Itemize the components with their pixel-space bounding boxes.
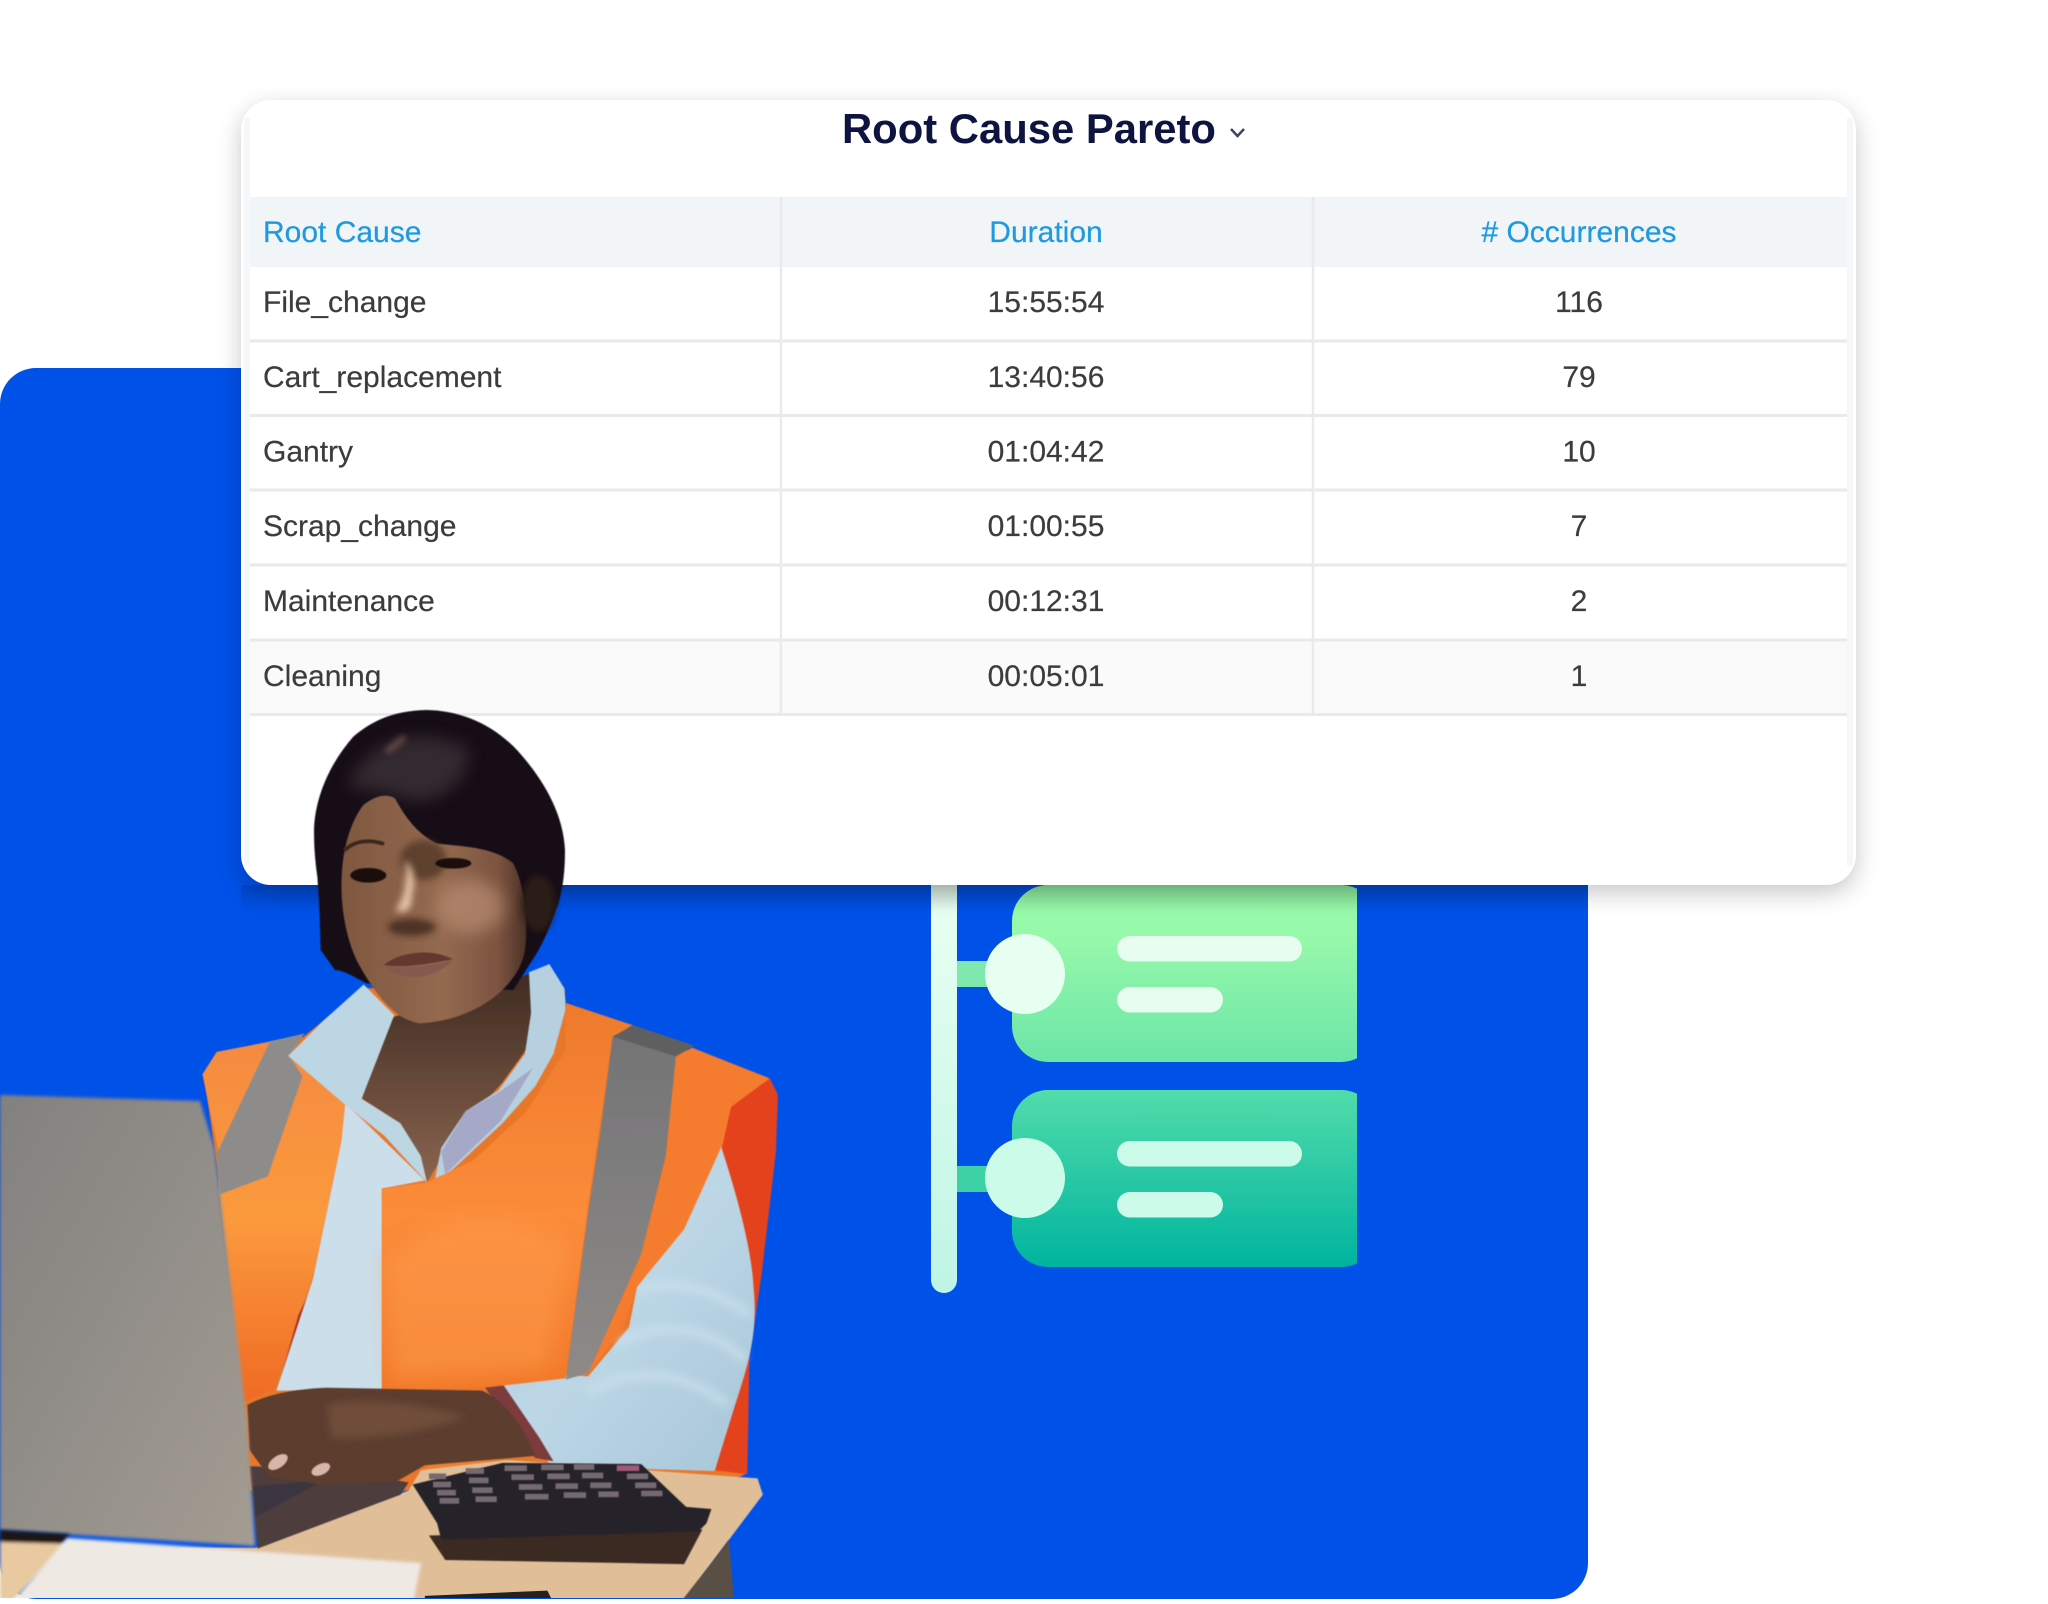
hand highlight [327,1402,466,1438]
torso [180,964,778,1603]
face [341,796,526,1023]
table rows: Scrap_change [263,510,456,543]
nose highlight [395,860,414,912]
nose shadow [388,919,436,936]
table rows: Gantry [263,436,353,468]
connector two [957,1166,1007,1192]
hair parting [387,737,405,752]
sweater body [276,1103,425,1391]
card two lines [1117,1141,1302,1218]
table rows: Cart_replacement [263,361,502,394]
card two [1012,1090,1377,1267]
eyebrow and eyes [344,841,471,883]
sleeve [484,1140,755,1471]
hair [314,710,565,990]
icon: timeline with two green cards [241,885,1588,1293]
table rows: 00:12:31 [988,585,1104,618]
laptop keys [252,1482,316,1517]
laptop lid [0,1095,255,1546]
collar right [435,964,566,1178]
table rows: 00:05:01 [988,660,1104,693]
card one lines [1117,936,1302,1012]
collar left [288,984,427,1182]
hair sheen [348,737,468,800]
cheek light [437,880,503,933]
table rows: 15:55:54 [988,286,1104,319]
head [314,710,565,1023]
calculator shadow [429,1529,702,1564]
table rows: 01:00:55 [988,510,1104,543]
vest back [715,1078,778,1474]
node one [985,934,1065,1014]
table rows: 2 [1571,585,1587,618]
reflective strip left [218,1033,304,1195]
ear [522,875,555,932]
reflective strip right [566,1025,694,1380]
table rows: 01:04:42 [988,436,1104,468]
vest left shadow [280,1296,308,1378]
table rows: 79 [1562,361,1596,394]
torso base silhouette [204,966,776,1491]
desk [180,1460,763,1603]
table rows: 7 [1571,510,1587,543]
shadow cast by the table card [241,885,1588,912]
vest right panel [588,1048,770,1374]
orange under wrist [426,1461,486,1469]
vest centre panel [382,1003,633,1391]
cuff [484,1384,553,1461]
vest folds [384,1221,572,1380]
table rows: 10 [1562,436,1596,468]
node two [985,1138,1065,1218]
desk leg [683,1540,735,1598]
phone [424,1590,551,1598]
calculator [413,1463,711,1540]
laptop keyboard deck [249,1466,409,1549]
last row background [250,641,1847,714]
brow shadow [400,840,447,880]
card edge bands [244,118,1853,866]
table header labels: # Occurrences [1481,216,1677,249]
table rows: Maintenance [263,585,435,618]
table header labels: Duration [989,216,1103,249]
illustration: worker at laptop [0,709,779,1598]
table rows [263,286,1603,693]
table rows: File_change [263,286,426,319]
hand [247,1388,535,1484]
lips [384,952,453,977]
table header background [250,197,1847,267]
table header labels [263,216,1677,249]
table rows: Cleaning [263,660,381,693]
neck [362,972,535,1182]
timeline bar [931,860,957,1293]
vest left panel [202,1036,347,1403]
calculator keys [429,1464,662,1504]
panel: blue background [0,368,1588,1599]
title: Root Cause Pareto [842,105,1216,152]
card one [1012,885,1377,1062]
icon: chevron [1231,129,1244,136]
panel: table card [241,100,1856,885]
connector one [957,961,1007,987]
table rows: 116 [1555,286,1603,319]
table header labels: Root Cause [263,216,421,249]
table rows: 13:40:56 [988,361,1104,394]
sleeve folds [588,1285,749,1405]
desk edge left [0,1530,70,1600]
paper [10,1538,421,1604]
table rows: 1 [1571,660,1587,693]
